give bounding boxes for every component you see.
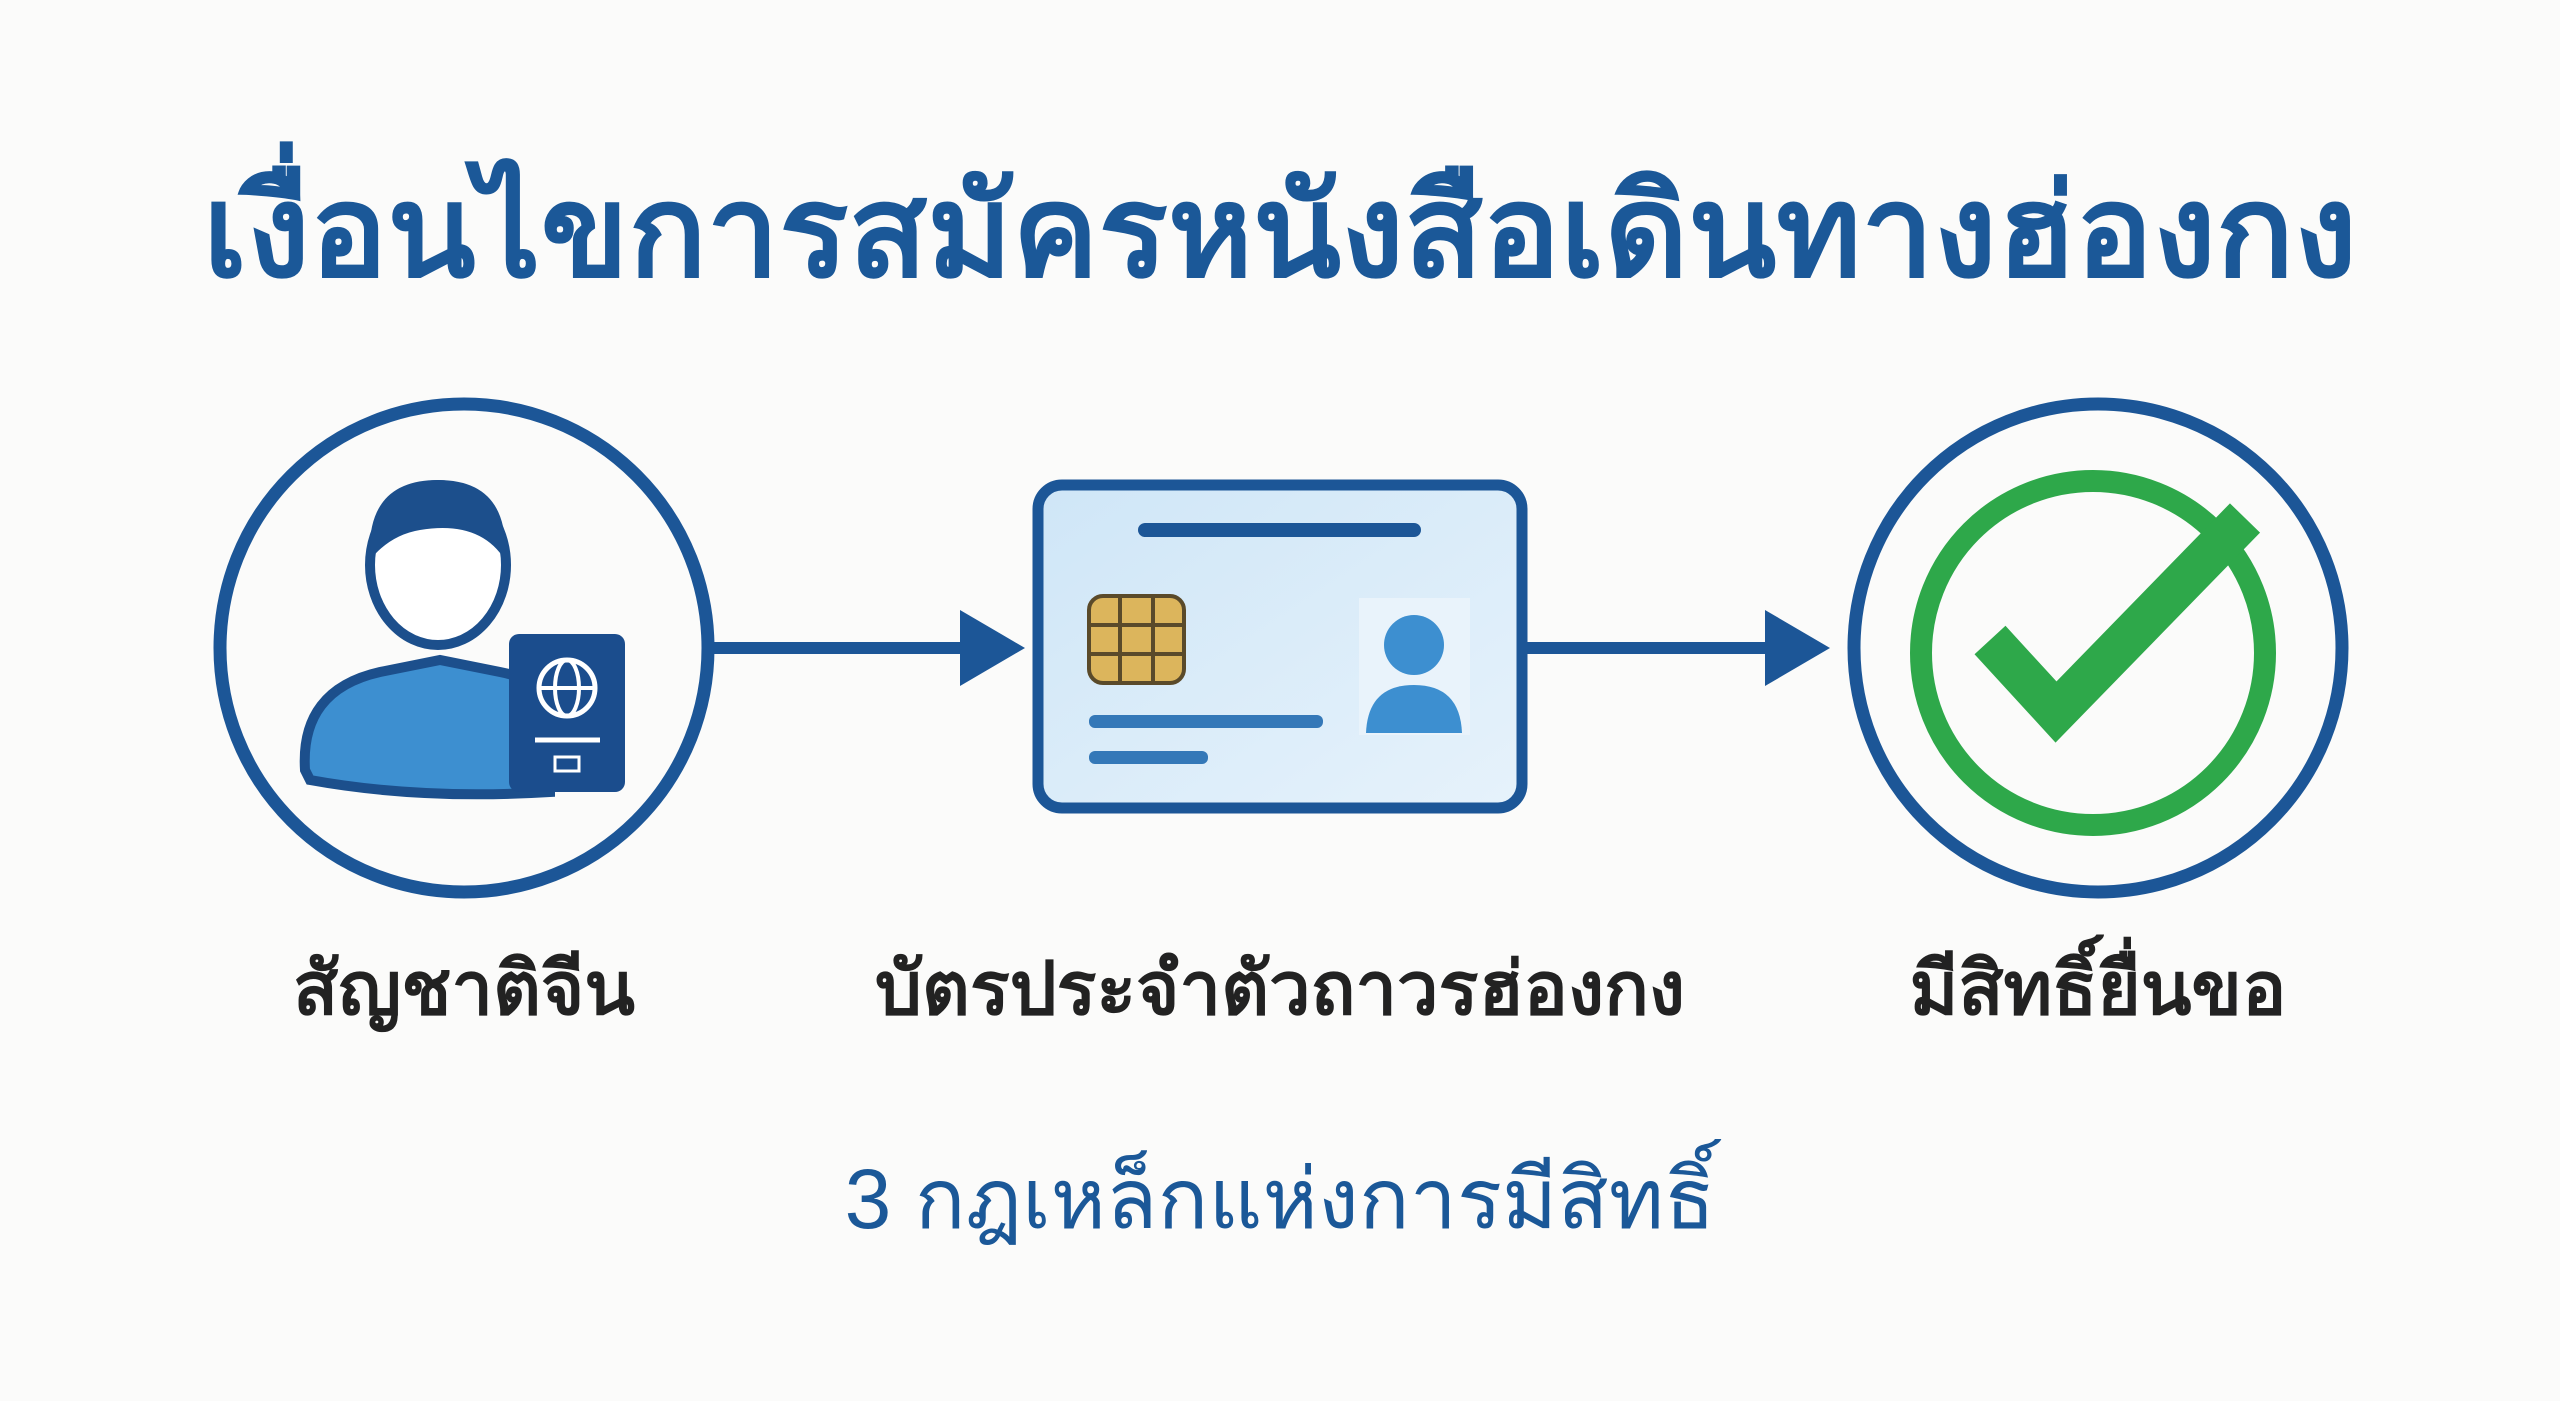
icon: HK ID card [1038, 485, 1522, 808]
label: HK permanent ID card: บัตรประจำตัวถาวรฮ่องกง [875, 947, 1685, 1030]
subtitle: 3 กฎเหล็กแห่งการมีสิทธิ์ [845, 1138, 1722, 1246]
label: Chinese nationality: สัญชาติจีน [293, 947, 635, 1032]
icon: person with passport circle [220, 404, 708, 892]
arrow 2 [1522, 610, 1830, 686]
title: เงื่อนไขการสมัครหนังสือเดินทางฮ่องกง [203, 141, 2357, 304]
label: eligible to apply: มีสิทธิ์ยื่นขอ [1910, 934, 2286, 1030]
icon: green checkmark circle [1854, 404, 2342, 892]
arrow 1 [714, 610, 1025, 686]
